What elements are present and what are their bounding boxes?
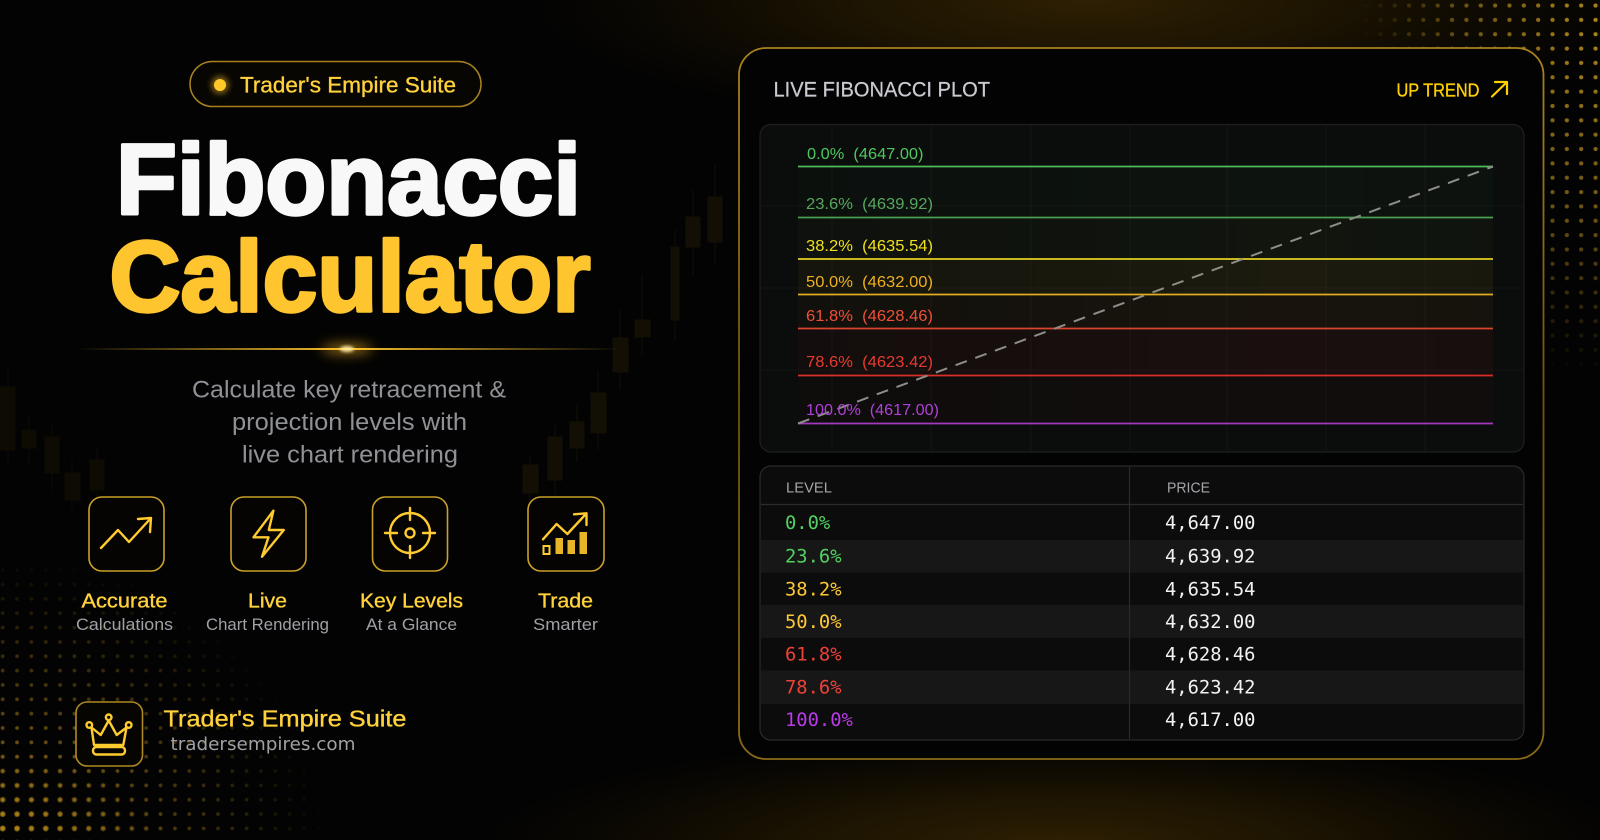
icon: trend line xyxy=(89,497,164,571)
table rows: prices: 4,623.42 xyxy=(1165,678,1255,698)
level labels: 100.0% (4617.00) xyxy=(806,402,939,419)
trend indicator: UP TREND xyxy=(1396,80,1480,100)
table rows: prices: 4,628.46 xyxy=(1165,644,1255,666)
footer brand: tradersempires.com xyxy=(170,734,356,755)
subtitle: Calculate key retracement & xyxy=(192,376,506,404)
icon: target xyxy=(372,497,448,571)
table header: LEVEL xyxy=(786,480,832,496)
feature: accurate calculations: Accurate xyxy=(82,590,168,612)
table rows: levels: 100.0% xyxy=(785,710,853,731)
badge: Trader's Empire Suite xyxy=(190,62,481,106)
chart: fibonacci levels xyxy=(760,124,1524,452)
table header: PRICE xyxy=(1167,480,1210,496)
background candlesticks xyxy=(0,165,722,510)
badge: Trader's Empire Suite: Trader's Empire Suite xyxy=(240,72,456,98)
table: level prices xyxy=(760,466,1524,740)
table rows: prices: 4,617.00 xyxy=(1165,710,1255,731)
feature: key levels at a glance: At a Glance xyxy=(366,615,457,634)
level labels: 61.8% (4628.46) xyxy=(806,308,933,325)
feature: live chart rendering xyxy=(206,497,329,634)
table rows: prices: 4,635.54 xyxy=(1165,580,1255,600)
table rows: levels: 0.0% xyxy=(785,513,830,534)
table rows: prices: 4,647.00 xyxy=(1165,513,1255,534)
table rows: prices xyxy=(1165,513,1255,731)
feature: trade smarter xyxy=(528,497,604,634)
level labels: 50.0% (4632.00) xyxy=(806,274,933,291)
title: Calculator xyxy=(110,221,590,333)
icon: crown xyxy=(76,702,142,766)
table rows: prices: 4,632.00 xyxy=(1165,612,1255,633)
level labels xyxy=(806,146,939,419)
table header xyxy=(786,480,1210,496)
table rows: levels: 23.6% xyxy=(785,546,842,568)
icon: bar chart with arrow xyxy=(528,497,604,571)
level lines xyxy=(798,166,1493,424)
feature: live chart rendering: Chart Rendering xyxy=(206,615,329,634)
title xyxy=(110,124,590,333)
footer brand xyxy=(76,702,406,766)
icon: up-right arrow xyxy=(1492,82,1507,96)
level labels: 78.6% (4623.42) xyxy=(806,354,933,371)
feature: accurate calculations: Calculations xyxy=(76,615,173,634)
feature: key levels at a glance: Key Levels xyxy=(360,590,463,612)
subtitle: projection levels with xyxy=(232,409,467,436)
feature: trade smarter: Trade xyxy=(538,590,593,612)
table rows: levels: 50.0% xyxy=(785,612,842,633)
dashed trend line xyxy=(798,166,1493,424)
panel: live fibonacci plot xyxy=(739,48,1544,759)
feature: key levels at a glance xyxy=(360,497,463,634)
level labels: 23.6% (4639.92) xyxy=(806,196,933,213)
level labels: 38.2% (4635.54) xyxy=(806,238,933,255)
subtitle xyxy=(192,376,506,468)
divider with glow xyxy=(77,344,622,354)
subtitle: live chart rendering xyxy=(242,442,458,468)
footer brand: Trader's Empire Suite xyxy=(164,706,406,732)
table rows: prices: 4,639.92 xyxy=(1165,546,1255,568)
feature: accurate calculations xyxy=(76,497,173,634)
table rows: levels xyxy=(785,513,853,731)
title: Fibonacci xyxy=(116,124,581,236)
feature: live chart rendering: Live xyxy=(248,590,287,612)
table rows: levels: 78.6% xyxy=(785,678,842,698)
table rows: levels: 61.8% xyxy=(785,644,842,666)
icon: lightning bolt xyxy=(231,497,306,571)
level labels: 0.0% (4647.00) xyxy=(807,146,924,163)
table rows: levels: 38.2% xyxy=(785,580,842,600)
feature: trade smarter: Smarter xyxy=(533,615,598,634)
panel heading: LIVE FIBONACCI PLOT xyxy=(774,78,990,102)
